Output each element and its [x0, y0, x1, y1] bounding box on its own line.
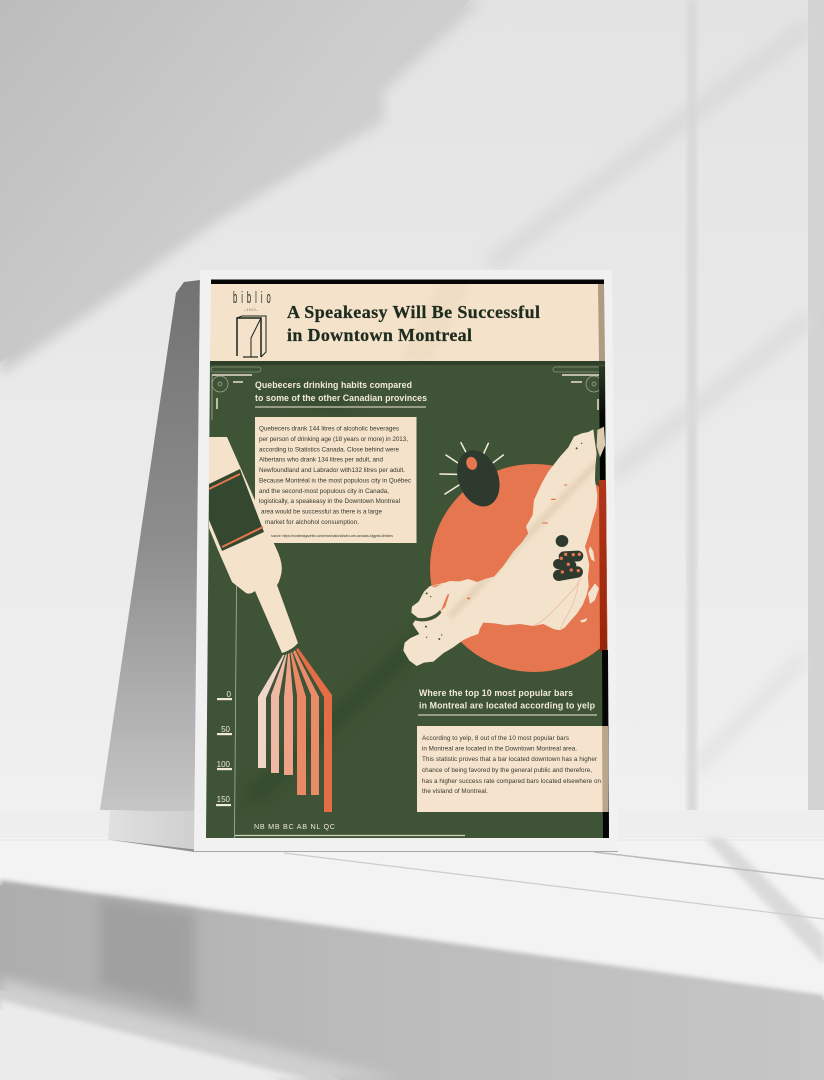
x axis province labels: NB MB BC AB NL QC — [254, 822, 335, 831]
text box: drinking habits: Because Montréal is the most populous city in Québec — [259, 478, 411, 484]
text box: drinking habits: according to Statistics Canada. Close behind were — [259, 446, 399, 453]
text box: drinking habits: Albertans who drank 134 litres per adult, and — [259, 457, 383, 464]
bar BC — [284, 653, 293, 775]
y axis scale — [216, 690, 232, 806]
white poster frame — [194, 270, 618, 852]
logo wordmark: biblio — [233, 288, 271, 307]
corner ornament right — [553, 367, 603, 410]
olive icon with rays — [440, 443, 507, 512]
green main panel — [206, 361, 609, 838]
top black band — [211, 280, 604, 284]
text box: drinking habits: Quebecers drank 144 litres of alcoholic beverages — [259, 426, 399, 432]
map circle — [430, 464, 608, 672]
text box: drinking habits: per person of drinking age (18 years or more) in 2013, — [259, 436, 408, 443]
bar MB — [271, 654, 287, 773]
text box: top bars — [417, 726, 608, 812]
bottle icon — [209, 437, 298, 653]
text box: drinking habits: logistically, a speakeasy in the Downtown Montreal — [259, 498, 400, 505]
title — [287, 302, 540, 345]
right edge print strip — [599, 366, 609, 838]
logo door icon — [237, 316, 266, 357]
y axis scale: 100 — [217, 760, 231, 769]
heading: drinking habits: Quebecers drinking habits compared — [255, 380, 412, 390]
text box: drinking habits: market for alchohol consumption. — [265, 519, 359, 526]
wall background with window shadows — [0, 0, 824, 812]
text box: drinking habits: Newfoundland and Labrador with132 litres per adult. — [259, 467, 405, 474]
label stripes — [209, 474, 263, 547]
text box: top bars: has a higher success rate compared bars located elsewhere on — [422, 778, 601, 785]
map of Montreal island — [403, 427, 605, 666]
text box: drinking habits — [255, 417, 416, 543]
bottle label — [209, 469, 264, 551]
logo year: –1920– — [244, 308, 258, 312]
heading: top bars: Where the top 10 most popular bars — [419, 688, 573, 698]
text box: top bars: According to yelp, 8 out of the 10 most popular bars — [422, 735, 569, 742]
heading: top bars: in Montreal are located according to yelp — [419, 700, 596, 710]
text box: drinking habits: area would be successful as there is a large — [261, 508, 382, 516]
bar AB — [290, 652, 306, 795]
text box: drinking habits: and the second-most populous city in Canada, — [259, 488, 389, 495]
bar chart axes — [234, 585, 465, 838]
title: A Speakeasy Will Be Successful — [287, 302, 540, 322]
bar chart: litres per province poured from bottle — [258, 648, 332, 812]
downtown bar cluster markers — [556, 535, 581, 575]
y axis scale: 50 — [221, 725, 231, 734]
text box: top bars: the visland of Montreal. — [422, 788, 488, 795]
heading: drinking habits — [255, 380, 427, 407]
heading: drinking habits: to some of the other Canadian provinces — [255, 393, 427, 403]
header panel — [210, 284, 605, 361]
text box: drinking habits: source: https://montrealgazette.com/news/national/who-are-canadas-biggest-drinkers — [271, 534, 393, 538]
corner ornament left — [211, 367, 261, 420]
text box: top bars: chance of being favored by the general public and therefore, — [422, 767, 592, 774]
heading: top bars — [418, 688, 597, 715]
text box: top bars: in Montreal are located in the Downtown Montreal area. — [422, 746, 577, 752]
title: in Downtown Montreal — [287, 325, 472, 345]
y axis scale: 0 — [227, 690, 232, 699]
poster cast shadow on wall — [100, 280, 200, 852]
floor and skirting ledge — [0, 810, 824, 1080]
bar NL — [293, 650, 319, 795]
bar NB — [258, 655, 284, 768]
bar QC — [296, 648, 332, 812]
text box: top bars: This statistic proves that a bar located downtown has a higher — [422, 756, 597, 763]
y axis scale: 150 — [217, 795, 231, 804]
